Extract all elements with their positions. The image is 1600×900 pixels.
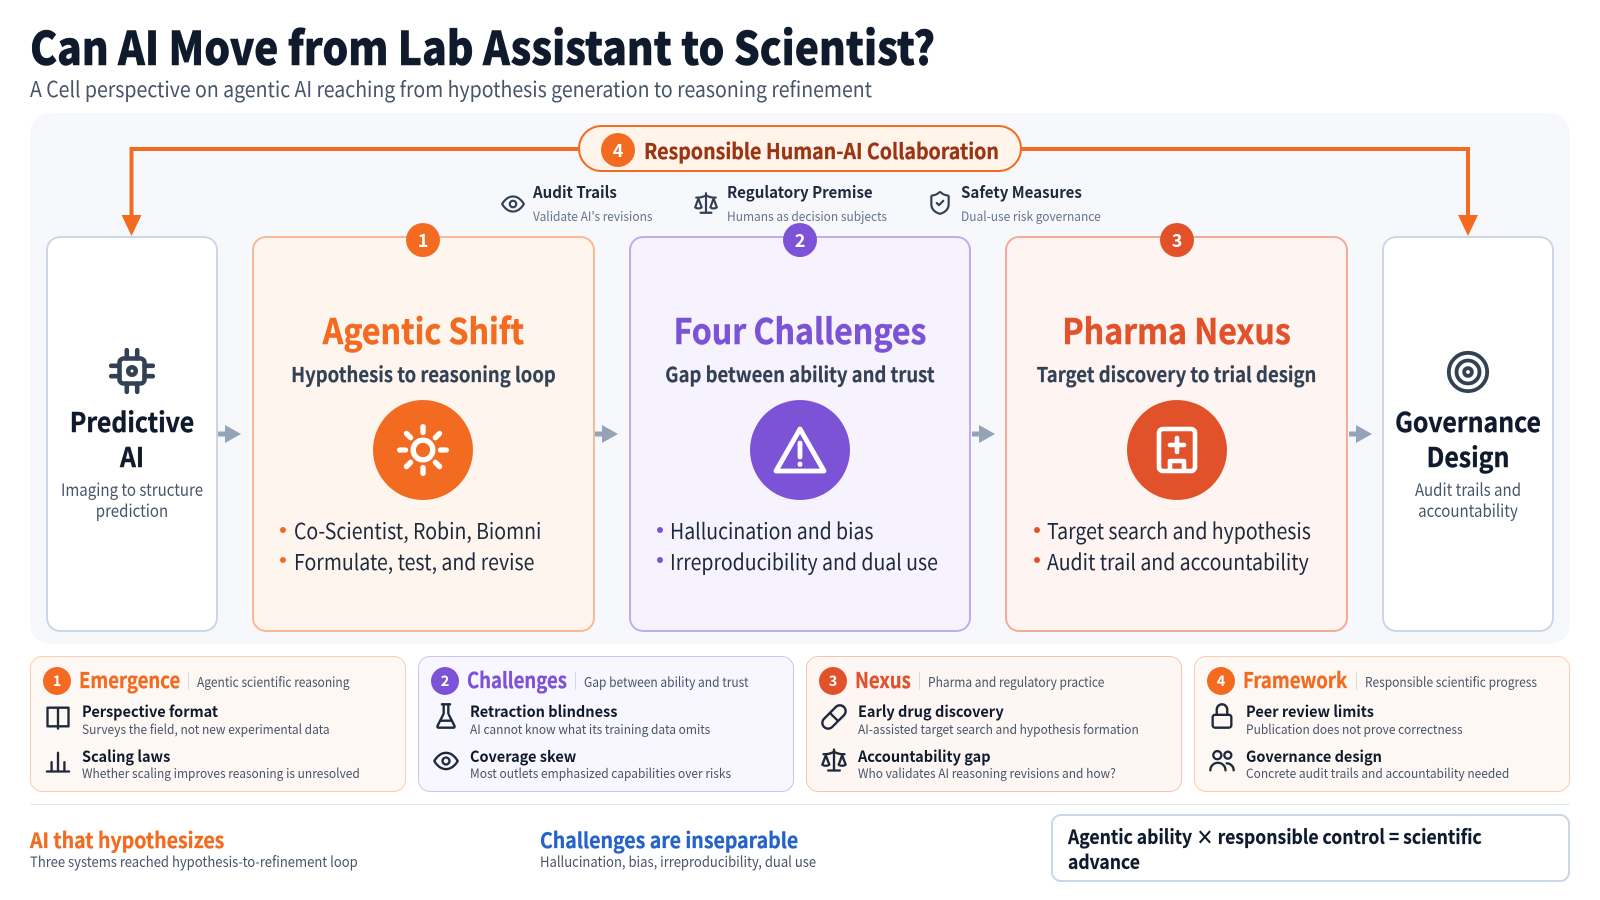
heading: AI that hypothesizes [30, 824, 224, 854]
description: Concrete audit trails and accountability needed [1246, 763, 1509, 782]
takeaway: AI that hypothesizes [30, 824, 358, 872]
divider [575, 672, 576, 690]
title: Peer review limits [1246, 700, 1374, 722]
item: accountability gap [821, 744, 1116, 782]
heading: Four Challenges [674, 304, 926, 355]
icon: eye [433, 752, 459, 770]
subtitle: A Cell perspective on agentic AI reaching from hypothesis generation to reasoning refinement [30, 73, 872, 104]
subheading: Target discovery to trial design [1037, 358, 1316, 388]
description: accountability [1418, 497, 1518, 522]
item: safety measures [930, 179, 1101, 225]
badge 3: 3 [829, 670, 837, 691]
equation callout [1051, 814, 1570, 882]
item: coverage skew [433, 744, 731, 782]
label: Regulatory Premise [727, 179, 873, 203]
bullet list: Target search and hypothesis [1047, 514, 1311, 546]
description: Hallucination, bias, irreproducibility, dual use [540, 851, 816, 872]
item: perspective format [46, 700, 330, 738]
badge 4: 4 [1217, 670, 1225, 691]
divider [188, 672, 189, 690]
panel: nexus [806, 656, 1182, 792]
badge 4: 4 [613, 137, 623, 163]
bullet list [657, 514, 938, 576]
panel: challenges [418, 656, 794, 792]
icon: scales [694, 192, 718, 214]
divider [919, 672, 920, 690]
badge 2: 2 [441, 670, 449, 691]
heading: Challenges [467, 664, 567, 695]
collaboration pill [578, 125, 1022, 172]
description: Publication does not prove correctness [1246, 719, 1463, 738]
item: governance design [1209, 744, 1509, 782]
heading [1395, 401, 1541, 475]
description: prediction [96, 497, 168, 522]
badge 3: 3 [1172, 227, 1182, 253]
description: AI-assisted target search and hypothesis formation [858, 719, 1139, 738]
card: agentic shift [252, 236, 595, 632]
description: Audit trails and [1415, 476, 1521, 501]
panel: main flow [30, 113, 1570, 644]
label: Audit Trails [533, 179, 617, 203]
icon: shield [930, 191, 950, 215]
description: Imaging to structure [61, 476, 203, 501]
badge 4 [1207, 667, 1235, 695]
heading: Challenges are inseparable [540, 824, 798, 854]
description: Three systems reached hypothesis-to-refinement loop [30, 851, 358, 872]
title: Can AI Move from Lab Assistant to Scientist? [30, 13, 935, 79]
description: Dual-use risk governance [961, 206, 1101, 225]
tagline: Gap between ability and trust [584, 670, 748, 690]
icon: users [1209, 750, 1235, 772]
card: pharma nexus [1005, 236, 1348, 632]
item: peer review limits [1212, 700, 1463, 738]
icon: chip [108, 348, 156, 394]
icon: flask [436, 703, 456, 729]
title: Coverage skew [470, 744, 576, 766]
tagline: Agentic scientific reasoning [197, 670, 350, 690]
badge 1 [43, 667, 71, 695]
card: governance design [1382, 236, 1554, 632]
badge 3 [1160, 223, 1194, 257]
bullet list [280, 514, 541, 576]
arrow: collaboration to governance design [1022, 147, 1478, 236]
heading: Emergence [79, 664, 180, 695]
icon: bar chart [46, 752, 70, 773]
item: scaling laws [46, 744, 360, 782]
heading: Nexus [855, 664, 911, 695]
icon: eye [501, 195, 525, 213]
icon: book [46, 706, 70, 730]
title: Governance design [1246, 744, 1382, 766]
description [1415, 476, 1521, 522]
description: Most outlets emphasized capabilities over risks [470, 763, 731, 782]
badge 1: 1 [418, 227, 428, 253]
bullet list: Co-Scientist, Robin, Biomni [294, 514, 541, 546]
heading: Governance [1395, 401, 1541, 440]
equation text: Agentic ability × responsible control = scientific advance [1068, 821, 1482, 875]
arrow: collaboration to predictive AI [122, 147, 578, 236]
heading: Design [1427, 436, 1509, 475]
bullet list: Irreproducibility and dual use [670, 544, 938, 576]
label: Safety Measures [961, 179, 1082, 203]
bullet list: Hallucination and bias [670, 514, 874, 546]
description: Whether scaling improves reasoning is unresolved [82, 763, 360, 782]
heading [70, 401, 194, 475]
title: Retraction blindness [470, 700, 617, 722]
subheading: Hypothesis to reasoning loop [291, 358, 556, 388]
badge 4 [601, 133, 635, 167]
badge 2 [431, 667, 459, 695]
badge 1 [406, 223, 440, 257]
badge 1: 1 [53, 670, 61, 691]
icon: scales [821, 748, 847, 772]
bullet list: Formulate, test, and revise [294, 544, 534, 576]
icon: target [1446, 350, 1490, 394]
pill label: Responsible Human-AI Collaboration [644, 135, 999, 166]
title: Early drug discovery [858, 700, 1004, 722]
description [61, 476, 203, 522]
description: AI cannot know what its training data omits [470, 719, 710, 738]
title: Scaling laws [82, 744, 170, 766]
item: retraction blindness [436, 700, 710, 738]
panel: emergence [30, 656, 406, 792]
divider [1356, 672, 1357, 690]
item: early drug discovery [821, 700, 1139, 738]
arrow [218, 425, 241, 443]
title: Perspective format [82, 700, 218, 722]
heading: Framework [1243, 664, 1347, 695]
description: Humans as decision subjects [727, 206, 887, 225]
description: Validate AI's revisions [533, 206, 652, 225]
icon: lock [1212, 703, 1232, 729]
card: predictive AI [46, 236, 218, 632]
badge 2: 2 [795, 227, 805, 253]
arrow [972, 425, 995, 443]
icon: pill [821, 704, 847, 730]
icon: sun [373, 400, 473, 500]
icon: warning [750, 400, 850, 500]
heading: Pharma Nexus [1062, 304, 1291, 355]
heading: AI [120, 436, 144, 475]
badge 2 [783, 223, 817, 257]
arrow [595, 425, 618, 443]
description: Surveys the field, not new experimental data [82, 719, 330, 738]
badge 3 [819, 667, 847, 695]
icon: hospital [1127, 400, 1227, 500]
heading: Agentic Shift [323, 304, 524, 355]
takeaway: challenges are inseparable [540, 824, 816, 872]
title: Accountability gap [858, 744, 991, 766]
tagline: Responsible scientific progress [1364, 670, 1536, 690]
panel: framework [1194, 656, 1570, 792]
subheading: Gap between ability and trust [665, 358, 935, 388]
bullet list [1034, 514, 1311, 576]
arrow [1349, 425, 1372, 443]
description: Who validates AI reasoning revisions and how? [858, 763, 1116, 782]
card: four challenges [629, 236, 971, 632]
item: regulatory premise [694, 179, 887, 225]
item: audit trails [501, 179, 652, 225]
heading: Predictive [70, 401, 194, 440]
tagline: Pharma and regulatory practice [928, 670, 1104, 690]
bullet list: Audit trail and accountability [1047, 544, 1309, 576]
